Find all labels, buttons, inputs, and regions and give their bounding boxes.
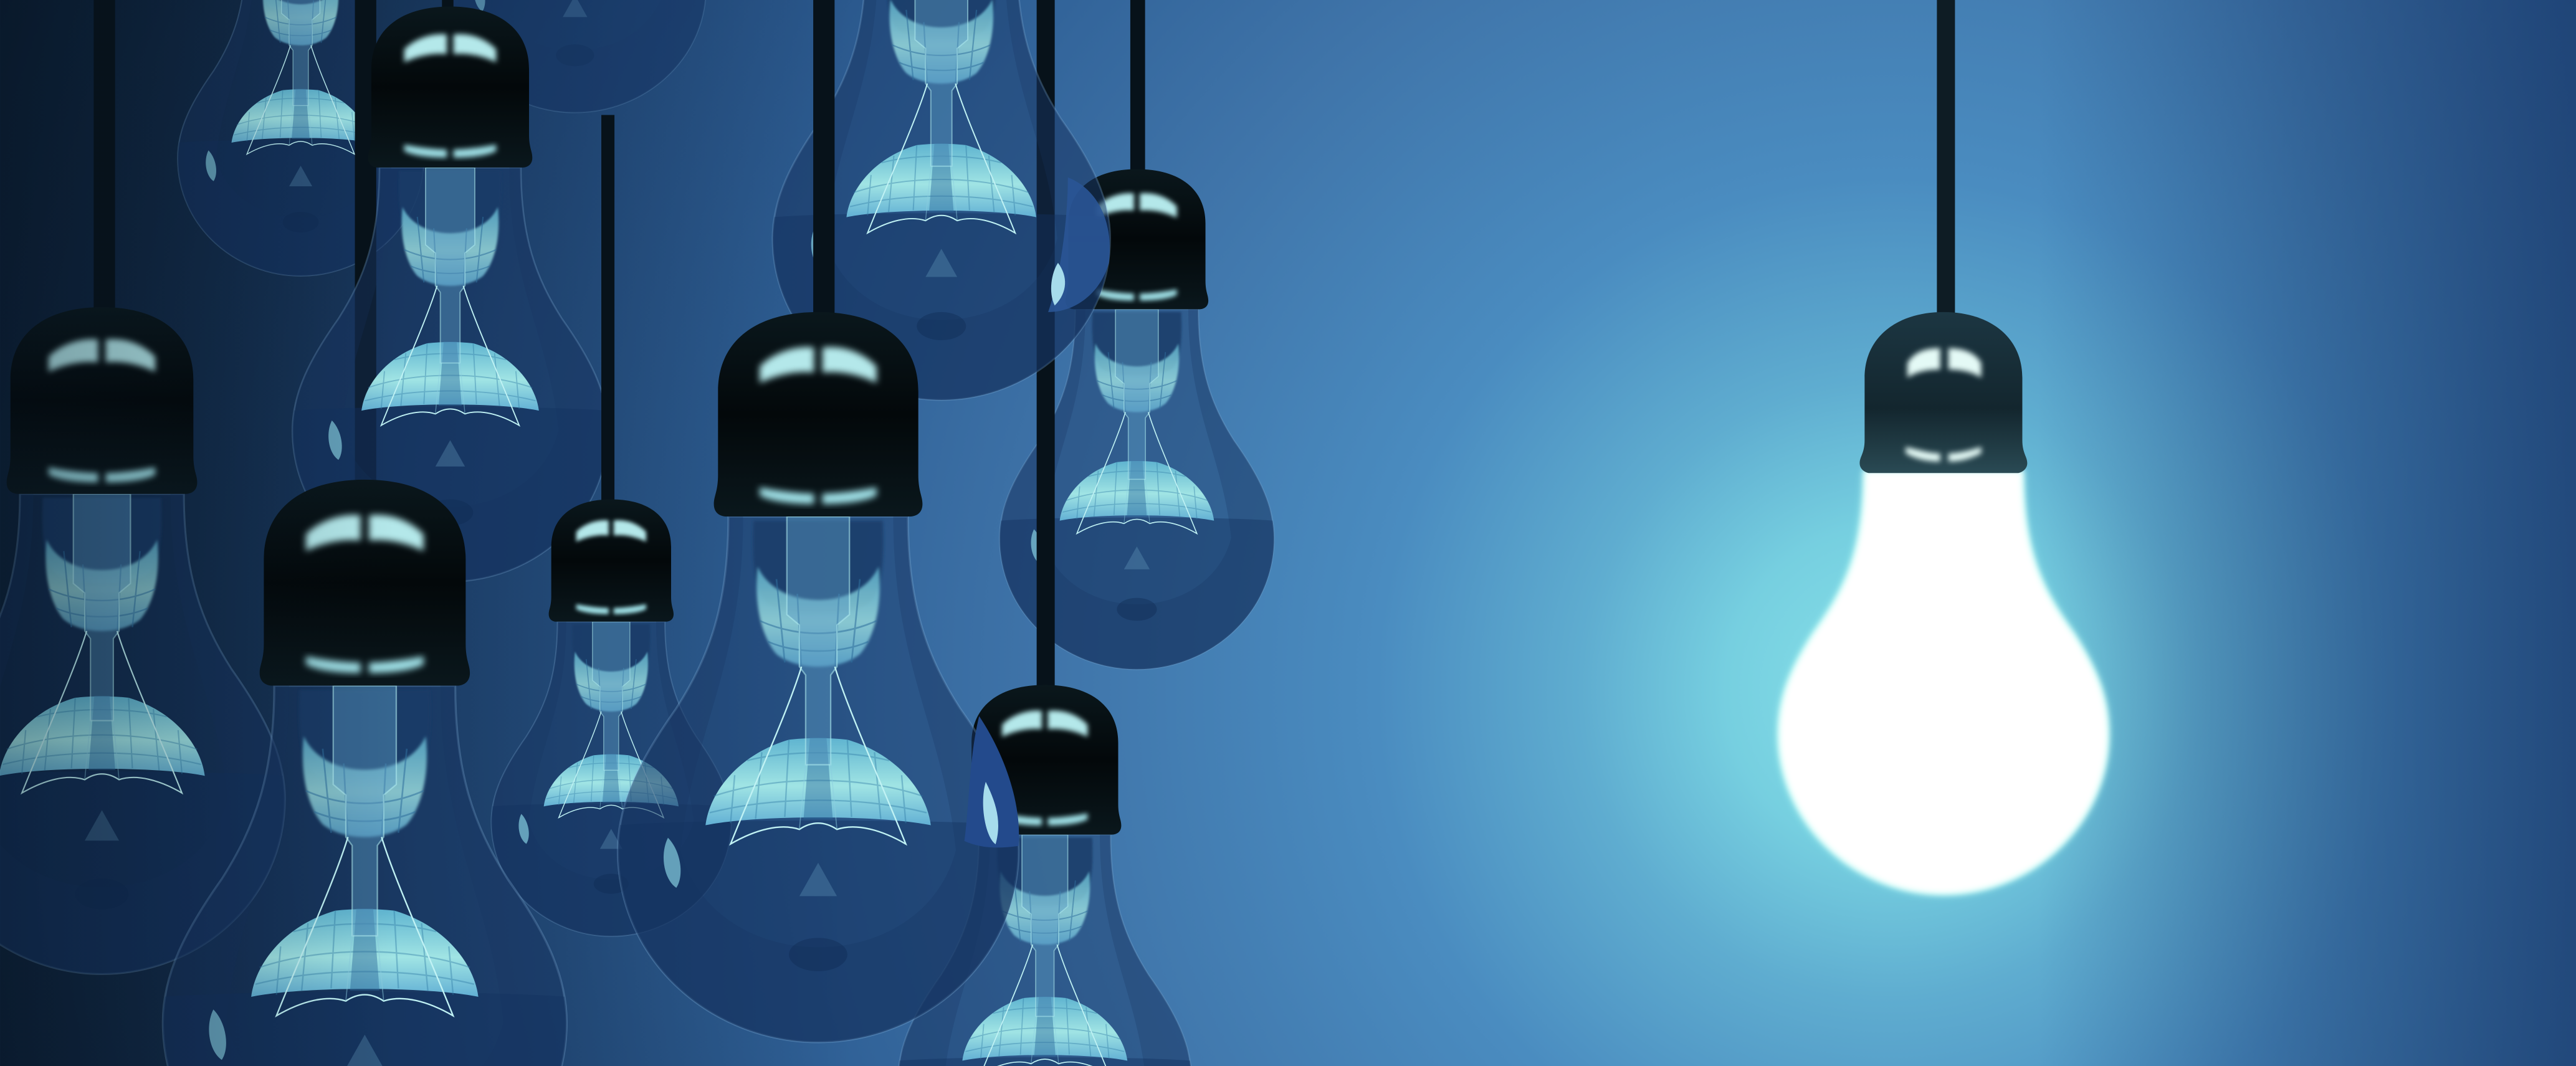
lit bulb cord [1937,0,1955,315]
glowing glass [1779,472,2108,893]
lit bulb [1779,0,2108,893]
bulb: back top left [178,0,424,278]
cord and bulb: back upper [292,0,608,585]
lit bulb socket highlights [1906,348,1982,462]
cord: front left bulb [355,0,376,485]
cord and bulb: lower right [898,685,1191,1066]
bulb: top centre large [773,0,1110,404]
lit bulb socket [1859,312,2027,473]
cord and bulb: small centre-left [491,115,731,939]
bulb: back top centre [444,0,706,115]
cord: lower right bulb [1037,0,1055,690]
bulb glow [1779,472,2108,893]
cord and bulb: far left [0,0,285,978]
cord and bulb: front centre [618,0,1019,1046]
cord and bulb: front left [163,480,566,1066]
cord and bulb: right small [999,0,1274,672]
left side shading [0,0,394,1066]
